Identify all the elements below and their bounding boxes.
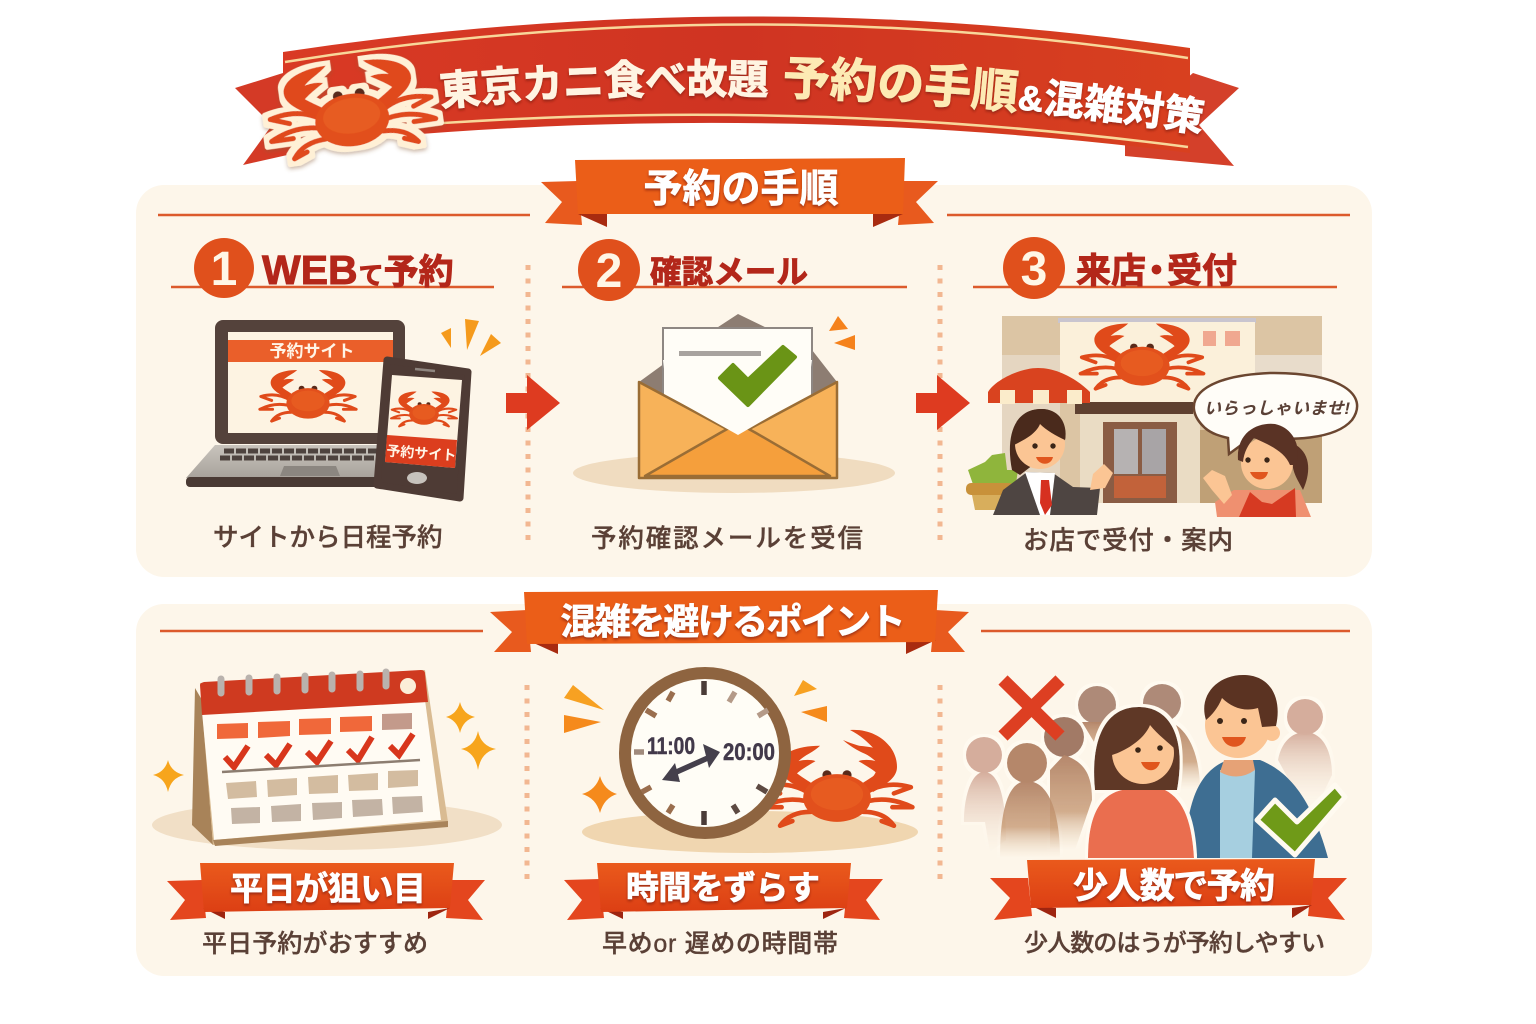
illustration: clock and crab <box>564 667 918 853</box>
banner main arc <box>283 16 1190 153</box>
caption: weekday: 平日予約がおすすめ <box>202 930 428 958</box>
section ribbon: crowd avoidance: 混雑を避けるポイント <box>560 601 906 642</box>
caption: step 3: お店で受付・案内 <box>1023 527 1233 555</box>
icon: laptop and phone <box>186 319 501 498</box>
section ribbon: reservation steps: 予約の手順 <box>643 168 839 211</box>
plant <box>966 453 1018 510</box>
arrow: clock double arrow <box>662 744 720 782</box>
step 3 heading: 来店・受付 <box>1076 252 1237 291</box>
person: staff man <box>993 409 1113 515</box>
icon: laptop and phone: 予約サイト <box>386 443 457 463</box>
ribbon: shift time: 時間をずらす <box>626 869 820 906</box>
icon: calendar <box>152 670 502 850</box>
icon: laptop and phone: 予約サイト <box>270 342 354 361</box>
step 2 heading: 2 <box>596 245 622 298</box>
banner right tail <box>1125 73 1239 166</box>
icon: envelope with check <box>573 314 895 493</box>
mark: check <box>1257 785 1345 855</box>
panel: reservation steps <box>136 185 1372 577</box>
ribbon: small groups <box>990 859 1347 920</box>
person: man <box>1185 675 1328 858</box>
section ribbon: reservation steps <box>158 158 1350 227</box>
panel: crowd avoidance <box>136 604 1372 976</box>
ribbon: shift time <box>564 863 883 920</box>
caption: shift time: 早めor 遅めの時間帯 <box>602 930 838 958</box>
person: staff woman <box>1203 424 1311 517</box>
step 1 heading <box>171 238 494 298</box>
step 1 heading: WEBて予約 <box>262 247 454 293</box>
step 2 heading: 確認メール <box>650 254 808 290</box>
illustration: small group versus crowd <box>964 675 1345 858</box>
illustration: clock and crab: 11:00 <box>647 733 695 760</box>
illustration: crab restaurant storefront <box>966 316 1357 517</box>
ribbon: weekday <box>167 863 485 920</box>
arrow: step 2 to 3 <box>916 375 970 430</box>
step 1 heading: 1 <box>211 243 237 296</box>
crowd silhouettes <box>964 684 1332 858</box>
section ribbon: crowd avoidance <box>160 590 1350 654</box>
caption: small groups: 少人数のはうが予約しやすい <box>1024 930 1325 957</box>
icon: sign crab <box>1081 324 1203 389</box>
ribbon: small groups: 少人数で予約 <box>1073 867 1275 906</box>
step 3 heading: 3 <box>1021 243 1047 296</box>
mark: cross <box>1003 680 1060 736</box>
person: woman <box>1088 707 1194 858</box>
icon: crab near clock <box>762 730 912 826</box>
illustration: clock and crab: 20:00 <box>723 739 775 766</box>
caption: step 1: サイトから日程予約 <box>213 524 443 552</box>
step 2 heading <box>562 239 907 301</box>
awning <box>988 368 1090 404</box>
banner title text: 東京カニ食べ故題 予約の手順&混雑対策 <box>439 56 1206 137</box>
title banner <box>235 16 1239 172</box>
speech bubble <box>1194 373 1357 454</box>
icon: title crab <box>262 51 439 162</box>
step 3 heading <box>973 237 1337 299</box>
icon: sparkles <box>153 702 496 792</box>
caption: step 2: 予約確認メールを受信 <box>591 525 863 553</box>
ribbon: weekday: 平日が狙い目 <box>230 870 426 907</box>
arrow: step 1 to 2 <box>506 375 560 430</box>
banner left tail <box>235 73 345 165</box>
speech bubble: いらっしゃいませ! <box>1204 399 1350 418</box>
